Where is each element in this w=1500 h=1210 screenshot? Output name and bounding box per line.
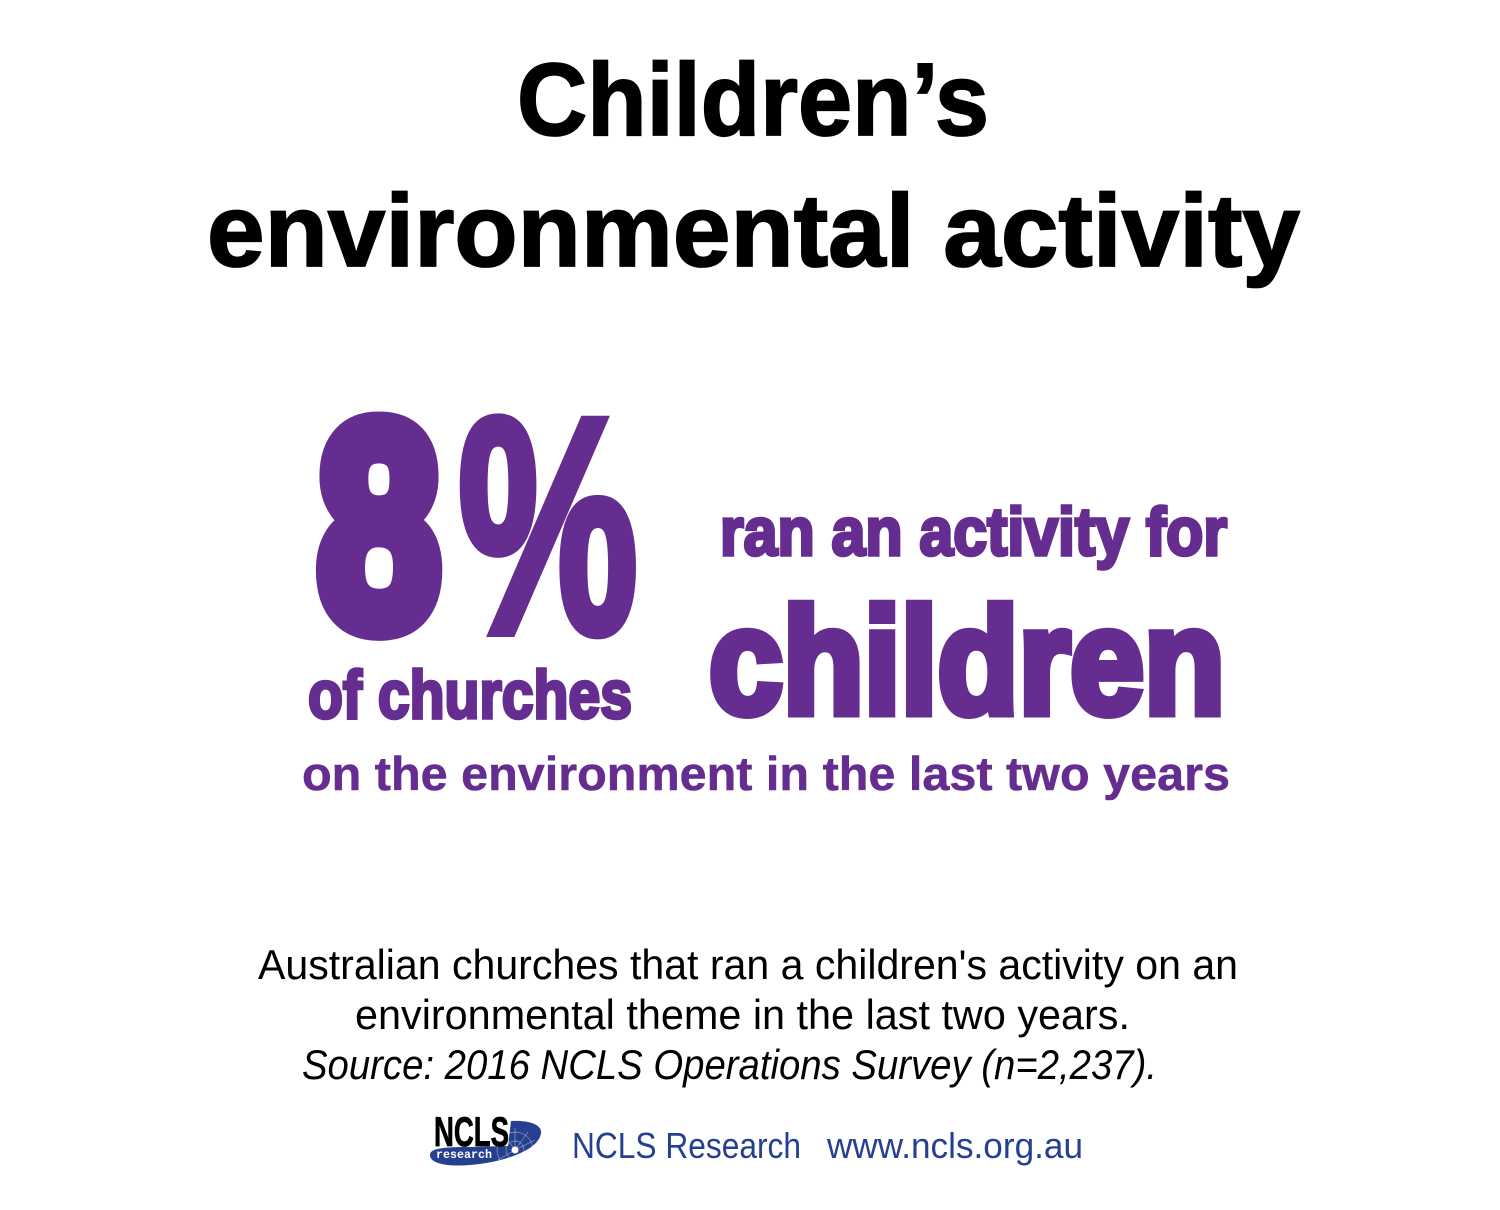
label: on the environment: on the environment in the last two years [302, 747, 1230, 800]
title: environmental activity [207, 173, 1300, 288]
description and source [258, 941, 1238, 1088]
footer: organisation and website: NCLS Research [572, 1125, 801, 1166]
icon: NCLS research logo: research [436, 1148, 492, 1162]
footer: organisation and website [572, 1125, 1083, 1166]
description and source: environmental theme in the last two years. [355, 991, 1130, 1038]
label: children: children [709, 577, 1225, 745]
label: ran an activity for: ran an activity for [720, 494, 1227, 570]
statistic: 8%: 8 [318, 364, 440, 688]
description and source: Australian churches that ran a children's activity on an [258, 941, 1238, 988]
title: Children’s [517, 42, 989, 157]
statistic: 8%: % [458, 355, 638, 698]
label: of churches: of churches [308, 657, 632, 733]
title [207, 42, 1300, 288]
icon: NCLS research logo: NCLS [434, 1108, 509, 1155]
description and source: Source: 2016 NCLS Operations Survey (n=2,237). [302, 1041, 1157, 1088]
footer: organisation and website: www.ncls.org.au [826, 1125, 1083, 1166]
statistic: 8% [318, 355, 638, 698]
